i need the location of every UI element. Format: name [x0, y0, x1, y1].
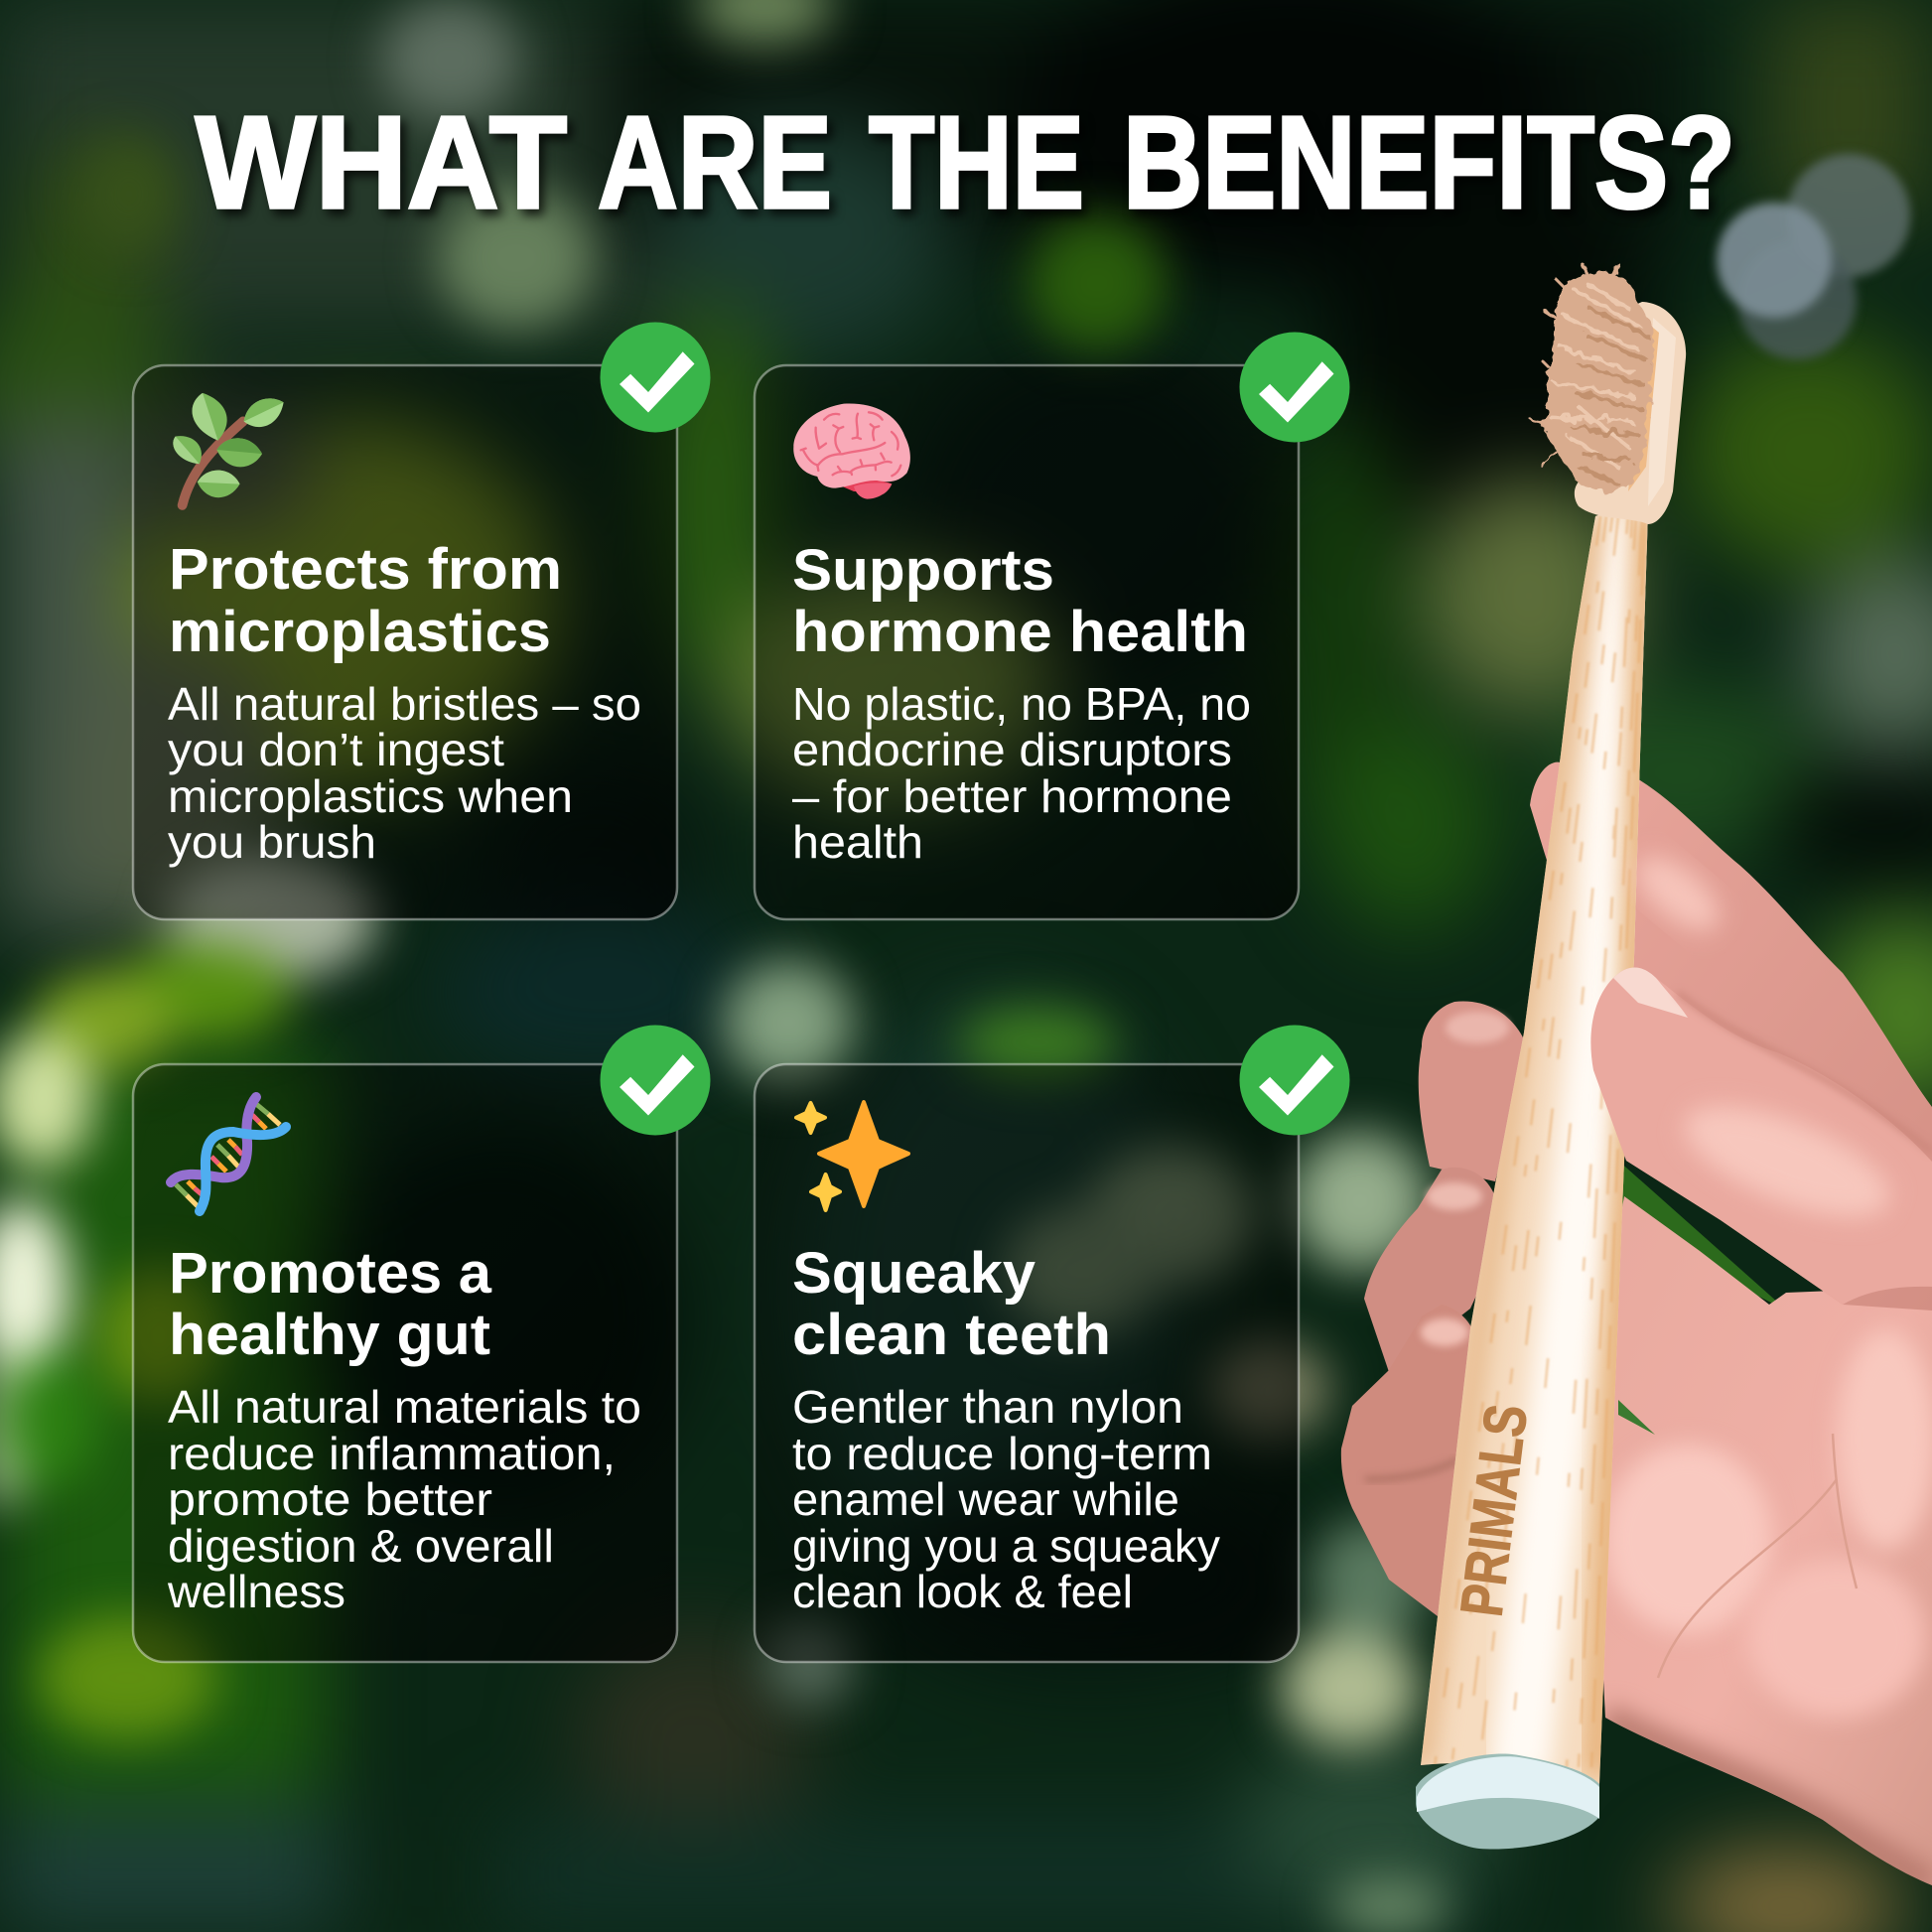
icon: brain	[793, 404, 910, 499]
toothbrush engraved brand: PRIMALS	[1448, 1401, 1540, 1620]
body text: digestion & overall	[168, 1520, 554, 1572]
body text: No plastic, no BPA, no	[792, 678, 1251, 730]
title	[196, 89, 1735, 235]
title: THE	[869, 89, 1084, 235]
icon: check badge	[600, 1025, 711, 1136]
body text: promote better	[168, 1473, 492, 1525]
panel: promotes a healthy gut	[133, 1025, 711, 1662]
heading: Protects from	[169, 537, 562, 602]
heading: hormone health	[792, 600, 1248, 664]
panel: supports hormone health	[755, 332, 1350, 919]
icon: leafy branch	[173, 393, 284, 505]
card background	[755, 1064, 1299, 1662]
body text: you don’t ingest	[168, 724, 504, 775]
panel: protects from microplastics	[133, 322, 711, 919]
toothbrush end cap	[1416, 1754, 1599, 1850]
hand: left fingers	[1341, 1001, 1529, 1616]
body text	[792, 1381, 1220, 1617]
icon: sparkles	[796, 1102, 908, 1210]
body text: to reduce long-term	[792, 1428, 1212, 1479]
hand: upper finger	[1530, 762, 1932, 1311]
gap between fingers	[1618, 1400, 1655, 1435]
hand and toothbrush photo	[1341, 264, 1932, 1885]
heading	[169, 537, 562, 664]
body text: reduce inflammation,	[168, 1428, 616, 1479]
heading	[792, 1241, 1111, 1367]
heading: microplastics	[169, 600, 551, 664]
body text: endocrine disruptors	[792, 724, 1232, 775]
body text: giving you a squeaky	[792, 1520, 1220, 1572]
title: ARE	[598, 89, 832, 235]
title: BENEFITS?	[1123, 89, 1735, 235]
toothbrush	[1416, 264, 1686, 1850]
body text: Gentler than nylon	[792, 1381, 1183, 1433]
body text: All natural bristles – so	[168, 678, 641, 730]
body text: wellness	[167, 1566, 345, 1617]
toothbrush handle	[1421, 509, 1648, 1784]
panel: squeaky clean teeth	[755, 1025, 1350, 1662]
card background	[133, 1064, 677, 1662]
toothbrush head	[1575, 302, 1686, 524]
toothbrush bristles	[1533, 264, 1655, 491]
icon: check badge	[1239, 1025, 1350, 1136]
body text: enamel wear while	[792, 1473, 1179, 1525]
body text: microplastics when	[168, 770, 573, 822]
heading: healthy gut	[169, 1303, 490, 1367]
body text: – for better hormone	[792, 770, 1232, 822]
hand: thumb finger	[1590, 967, 1932, 1305]
title: WHAT	[196, 89, 567, 235]
body text: health	[792, 816, 923, 868]
heading: Promotes a	[169, 1241, 492, 1306]
heading: Squeaky	[792, 1241, 1035, 1306]
body text	[167, 1381, 641, 1617]
heading	[792, 538, 1248, 664]
icon: DNA helix	[171, 1097, 286, 1211]
card background	[755, 365, 1299, 919]
body text: clean look & feel	[792, 1566, 1133, 1617]
body text: you brush	[168, 816, 376, 868]
card background	[133, 365, 677, 919]
heading: Supports	[792, 538, 1054, 603]
hand: palm	[1588, 1196, 1932, 1885]
body text	[168, 678, 641, 868]
icon: check badge	[600, 322, 711, 433]
body text: All natural materials to	[168, 1381, 641, 1433]
icon: check badge	[1239, 332, 1350, 443]
heading	[169, 1241, 492, 1367]
heading: clean teeth	[792, 1303, 1111, 1367]
body text	[792, 678, 1251, 868]
